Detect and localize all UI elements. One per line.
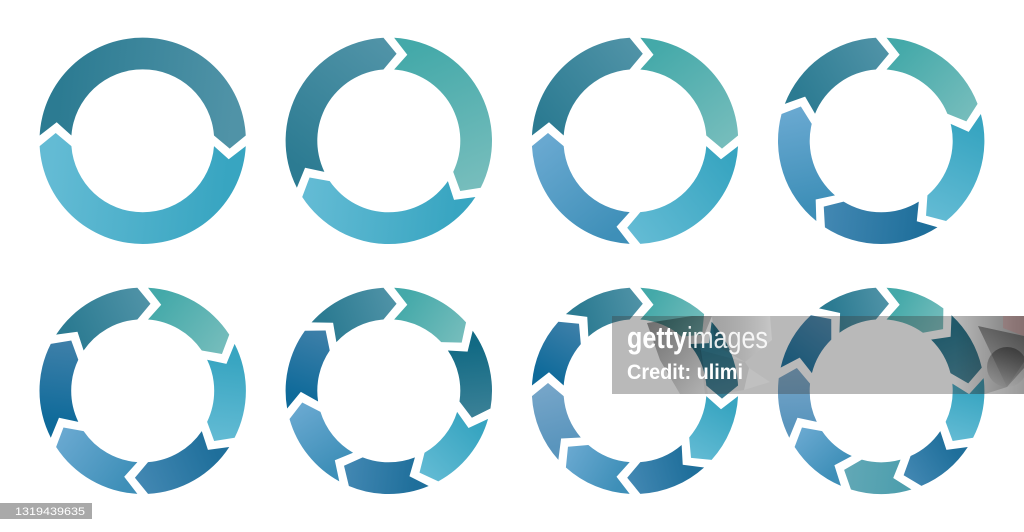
arrow segment: teal [148, 288, 229, 354]
arrow segment: deep blue [131, 414, 229, 517]
id background [0, 503, 92, 519]
arrow segment: dark petrol [923, 315, 995, 386]
ring: 2 segments [40, 38, 246, 244]
watermark polygons: left cluster [647, 316, 772, 394]
arrow segment: cyan [419, 407, 488, 489]
arrow segment: deep blue [624, 433, 704, 513]
arrow segment: upper left dark teal [532, 38, 643, 135]
arrow segment: dark teal [819, 272, 892, 343]
ring: 9 segments [761, 272, 995, 509]
arrow segment: light blue [743, 100, 865, 221]
arrow segment: bottom cyan [294, 120, 475, 282]
arrow segment: deep blue [815, 160, 937, 281]
arrow segment: bottom cyan [40, 133, 246, 244]
watermark band [612, 316, 1024, 394]
image id tag [0, 503, 92, 519]
arrow segment: dark petrol [430, 331, 518, 421]
arrow segment: steel blue [761, 366, 828, 438]
arrow segment: light blue [56, 428, 137, 494]
arrow segment: lower left blue [532, 133, 630, 244]
arrow segment: light blue [788, 424, 856, 486]
ring: 6 segments [10, 264, 275, 517]
arrow segment: cyan [901, 114, 1009, 226]
arrow segment: upper right teal [640, 38, 738, 149]
arrow segment: dark petrol [677, 322, 757, 401]
id number: 1319439635 [15, 506, 85, 518]
arrow segment: dark teal [312, 266, 399, 357]
ring: 8 segments [513, 269, 757, 513]
arrow segment: light blue [566, 445, 630, 494]
arrow segment: cyan [689, 396, 738, 460]
arrow segment: deep blue [900, 424, 968, 496]
arrow segment: teal [887, 288, 943, 333]
arrow segment: light blue [274, 401, 363, 481]
arrow segment: teal [640, 288, 704, 337]
band background [612, 316, 1024, 394]
arrow segment: deep blue [340, 436, 429, 517]
arrow segment: teal [394, 288, 466, 343]
ring: 3 segments [248, 26, 492, 282]
ring: 4 segments [532, 38, 738, 244]
arrow segment: teal [887, 38, 978, 121]
arrow segment: navy blue [10, 334, 108, 438]
arrow segment: left dark teal [248, 26, 430, 188]
ring: 7 segments [271, 266, 518, 517]
watermark polygons: right cluster [955, 316, 1024, 394]
arrow segment: cyan [939, 378, 993, 442]
arrow segment: grey teal [843, 447, 911, 509]
arrow segment: cyan [177, 344, 275, 447]
arrow segment: lower right cyan [627, 146, 738, 244]
arrow segment: dark teal [56, 264, 154, 368]
arrow segment: dark teal [566, 269, 646, 349]
arrow segment: right teal [394, 38, 492, 191]
arrow segment: navy blue [271, 326, 341, 409]
arrow segment: navy blue [781, 312, 835, 375]
arrow segment: navy blue [532, 322, 581, 385]
logo: gettyimages: gettyimages [627, 320, 768, 355]
arrow segment: top dark teal [40, 38, 246, 149]
ring: 5 segments [743, 17, 1009, 281]
arrow segment: dark teal [785, 17, 892, 130]
arrow segment: steel blue [513, 380, 593, 460]
credit line: Credit: ulimi [627, 361, 743, 384]
